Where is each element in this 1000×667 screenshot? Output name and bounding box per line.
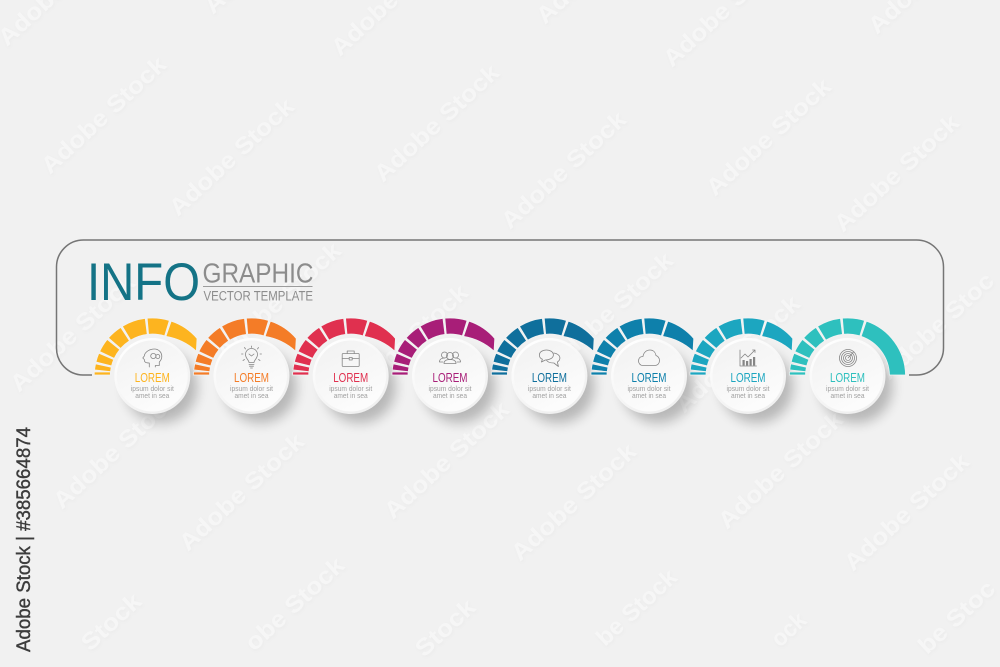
watermarks: Adobe Stock bbox=[48, 385, 184, 514]
step 2 orange bbox=[194, 318, 296, 423]
description: amet in sea bbox=[532, 391, 567, 400]
step 1 yellow bbox=[94, 318, 197, 423]
circle bbox=[313, 338, 389, 414]
description bbox=[528, 384, 572, 400]
circle bbox=[611, 338, 687, 414]
label: LOREM bbox=[532, 371, 567, 385]
icon: cloud bbox=[638, 350, 660, 366]
step 7 light blue bbox=[690, 318, 793, 423]
description: ipsum dolor sit bbox=[528, 384, 572, 393]
label: LOREM bbox=[730, 371, 766, 385]
description bbox=[131, 384, 175, 400]
watermarks: Adobe Stock bbox=[5, 268, 141, 397]
watermarks: Stock bbox=[410, 593, 481, 662]
icon: bar chart bbox=[740, 350, 756, 366]
icon: people bbox=[440, 352, 460, 364]
label: LOREM bbox=[234, 371, 269, 385]
icon: chat bubbles bbox=[539, 350, 560, 366]
watermarks: Adobe Stock bbox=[174, 427, 310, 556]
rounded frame outline bbox=[56, 240, 944, 375]
circle bbox=[412, 338, 488, 414]
description: amet in sea bbox=[234, 391, 269, 400]
label: LOREM bbox=[830, 371, 865, 385]
watermarks: Adobe Stoc bbox=[875, 267, 999, 385]
circle bbox=[810, 338, 886, 414]
watermarks: Adobe Stock bbox=[379, 395, 515, 524]
watermarks: Adobe Stock bbox=[506, 437, 642, 566]
stock id vertical text: Adobe Stock | #385664874 bbox=[14, 427, 35, 652]
arc segments bbox=[790, 318, 906, 375]
circle bbox=[114, 338, 190, 414]
watermarks: Adobe Stock bbox=[670, 289, 806, 418]
title word GRAPHIC: GRAPHIC bbox=[202, 258, 314, 288]
label: LOREM bbox=[432, 371, 468, 385]
description: ipsum dolor sit bbox=[726, 384, 770, 393]
description: amet in sea bbox=[731, 391, 766, 400]
description: amet in sea bbox=[632, 391, 667, 400]
title bbox=[87, 253, 314, 312]
description: ipsum dolor sit bbox=[131, 384, 175, 393]
description bbox=[628, 384, 671, 400]
arc segments bbox=[491, 318, 594, 375]
watermarks: Adobe Stock bbox=[338, 278, 474, 407]
arc segments bbox=[94, 318, 197, 375]
description: ipsum dolor sit bbox=[628, 384, 671, 393]
description: ipsum dolor sit bbox=[428, 384, 472, 393]
subtitle: VECTOR TEMPLATE bbox=[204, 289, 313, 304]
description bbox=[428, 384, 472, 400]
description: ipsum dolor sit bbox=[230, 384, 274, 393]
description: amet in sea bbox=[135, 391, 170, 400]
description bbox=[726, 384, 770, 400]
watermarks: Adobe Stock bbox=[713, 405, 849, 534]
icon: target bbox=[840, 350, 856, 366]
watermarks: Adobe Stock bbox=[701, 72, 837, 201]
watermarks: obe Stock bbox=[240, 551, 350, 656]
watermarks: Adobe Stock bbox=[164, 92, 300, 221]
watermarks: ock bbox=[766, 606, 812, 652]
description: amet in sea bbox=[830, 391, 865, 400]
step 4 magenta bbox=[392, 318, 495, 423]
circle bbox=[511, 338, 587, 414]
arc segments bbox=[392, 318, 495, 375]
label: LOREM bbox=[333, 371, 368, 385]
watermarks: Adobe Stock bbox=[839, 447, 975, 576]
icon: light bulb bbox=[242, 346, 262, 368]
watermarks: Stock bbox=[76, 587, 147, 656]
description: amet in sea bbox=[433, 391, 468, 400]
watermarks: Adobe Stock bbox=[829, 108, 965, 237]
step 5 dark blue bbox=[491, 318, 594, 423]
step 3 red bbox=[293, 318, 396, 423]
description bbox=[329, 384, 373, 400]
circle bbox=[710, 338, 786, 414]
watermarks: be Stoc bbox=[913, 575, 1000, 659]
icon: head with gears bbox=[143, 349, 162, 367]
watermarks: Adobe Stock bbox=[369, 58, 505, 187]
circle bbox=[214, 338, 290, 414]
watermarks: Adobe Stock bbox=[36, 50, 172, 179]
description: ipsum dolor sit bbox=[826, 384, 870, 393]
icon: briefcase bbox=[342, 351, 359, 366]
description bbox=[230, 384, 274, 400]
description: ipsum dolor sit bbox=[329, 384, 373, 393]
watermarks: Adobe Stock bbox=[543, 246, 679, 375]
label: LOREM bbox=[135, 371, 170, 385]
watermarks: Adobe Stock bbox=[211, 236, 347, 365]
title word INFO: INFO bbox=[87, 253, 200, 312]
watermarks: Adobe Stock bbox=[496, 105, 632, 234]
description: amet in sea bbox=[334, 391, 368, 400]
arc segments bbox=[591, 318, 694, 375]
arc segments bbox=[194, 318, 296, 375]
watermarks: be Stock bbox=[591, 563, 683, 651]
arc segments bbox=[293, 318, 395, 375]
description bbox=[826, 384, 870, 400]
arc segments bbox=[690, 318, 793, 375]
step 8 teal bbox=[790, 318, 906, 423]
step 6 blue bbox=[591, 318, 694, 423]
label: LOREM bbox=[632, 371, 666, 385]
